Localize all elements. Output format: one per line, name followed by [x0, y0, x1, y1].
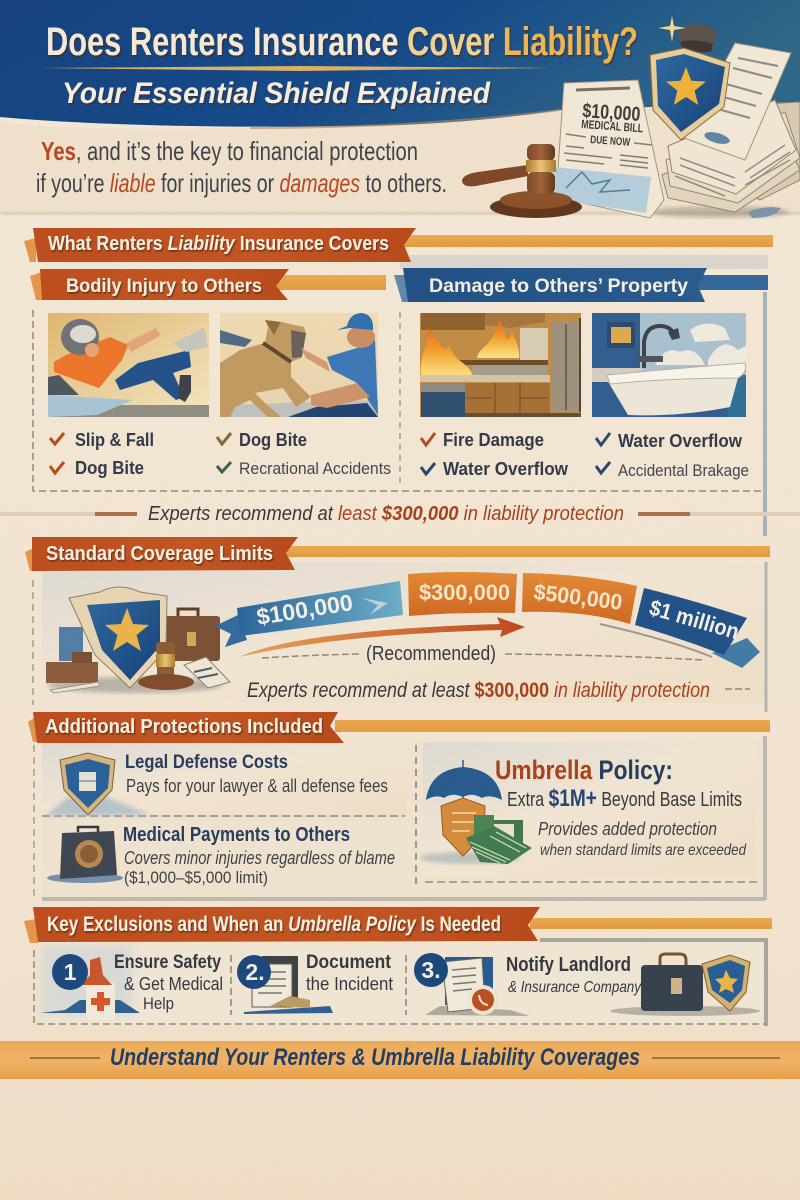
text: medical payments: Medical Payments to Others [123, 824, 350, 846]
list: bodily injury checks: Dog Bite [75, 458, 144, 478]
text: legal defense costs: Pays for your lawyer & all defense fees [126, 776, 388, 796]
icon: shield with star [650, 16, 730, 140]
illustration: medical bill: DUE NOW [590, 134, 631, 149]
icon: legal shield [45, 753, 150, 816]
text: umbrella policy: Umbrella Policy: [495, 755, 673, 785]
illustration: medical bill [554, 80, 664, 218]
text: umbrella policy: Extra $1M+ Beyond Base Limits [507, 785, 742, 812]
intro text: Yes, and it’s the key to financial protection [41, 136, 418, 166]
list: bodily injury checks [50, 430, 391, 478]
intro text: if you’re liable for injuries or damages to others. [36, 168, 447, 198]
sub heading: property damage: Damage to Others’ Property [429, 276, 688, 297]
section 1 header: What Renters Liability Insurance Covers [48, 233, 389, 255]
step 2 [237, 952, 393, 1014]
list: property damage checks: Accidental Brakage [618, 461, 749, 480]
step 3: 3. [421, 957, 441, 983]
list: property damage checks: Water Overflow [618, 431, 743, 451]
list: property damage checks: Fire Damage [443, 430, 544, 450]
footer band: Understand Your Renters & Umbrella Liability Coverages [110, 1044, 640, 1071]
step 1: Help [143, 994, 174, 1013]
section 2 header [25, 537, 770, 571]
step 2: Document [306, 952, 392, 973]
step 3 [414, 953, 642, 1016]
section 1 header [24, 228, 773, 269]
step 1: Ensure Safety [114, 952, 221, 973]
image: slip and fall [48, 313, 209, 417]
sub heading: bodily injury: Bodily Injury to Others [66, 276, 262, 297]
panel: steps background [34, 940, 766, 1026]
panel: what is covered frame [0, 292, 765, 536]
text: legal defense costs: Legal Defense Costs [125, 752, 288, 773]
text: umbrella policy: when standard limits are exceeded [540, 842, 747, 859]
icon: briefcase and shield [610, 954, 760, 1016]
text: medical payments: Covers minor injuries regardless of blame [124, 848, 395, 868]
text: umbrella policy: Provides added protection [538, 819, 717, 839]
section 4 header [24, 907, 772, 943]
section 4 header: Key Exclusions and When an Umbrella Policy Is Needed [47, 913, 501, 936]
illustration: paper pile [650, 43, 800, 218]
ribbon: $500,000: $500,000 [532, 579, 624, 615]
sub heading: property damage [394, 268, 768, 302]
image: water overflow tub [592, 313, 746, 417]
ribbon: $100,000: $100,000 [255, 589, 355, 630]
intro text [36, 136, 447, 198]
ribbon: $1 million: $1 million [647, 595, 742, 644]
label: recommended [262, 643, 705, 665]
list: bodily injury checks: Dog Bite [239, 430, 307, 450]
subtitle: Your Essential Shield Explained [62, 77, 491, 110]
step 2: the Incident [306, 974, 393, 994]
ribbon: $300,000 [408, 572, 517, 616]
list: bodily injury checks: Recrational Accidents [239, 459, 391, 478]
text: medical payments [123, 824, 395, 887]
text: umbrella policy [495, 755, 747, 859]
illustration: shield, briefcase and gavel [46, 587, 230, 693]
sub heading: bodily injury [30, 269, 386, 300]
illustration: medical bill: MEDICAL BILL [581, 117, 644, 135]
list: property damage checks: Water Overflow [443, 459, 569, 479]
image: fire damage [420, 313, 581, 417]
panel: additional protections background [34, 736, 765, 900]
step 2: 2. [245, 959, 265, 985]
step 1: 1 [64, 959, 77, 985]
ribbon: $1 million [635, 588, 760, 668]
illustration: medical bill: $10,000 [582, 100, 641, 126]
icon: umbrella with shield and money [420, 760, 532, 864]
section 3 header: Additional Protections Included [45, 716, 323, 738]
header banner [0, 0, 800, 215]
callout: coverage recommendation: Experts recommend at least $300,000 in liability protection [247, 679, 710, 702]
icon: gavel [462, 144, 582, 218]
step 1: & Get Medical [124, 974, 223, 994]
arrow: coverage progression [239, 617, 712, 657]
footer band [0, 1041, 800, 1079]
step 3: Notify Landlord [506, 954, 631, 976]
step 1 [40, 952, 223, 1020]
list: property damage checks [421, 430, 749, 480]
title: Does Renters Insurance Cover Liability? [46, 20, 638, 64]
text: legal defense costs [125, 752, 388, 796]
list: bodily injury checks: Slip & Fall [75, 430, 154, 450]
ribbon: $300,000: $300,000 [419, 580, 510, 605]
callout: expert recommendation: Experts recommend at least $300,000 in liability protection [148, 503, 624, 525]
ribbon: $500,000 [522, 573, 637, 624]
step 3: & Insurance Company [508, 979, 642, 996]
icon: medical bag [47, 827, 123, 883]
text: medical payments: ($1,000–$5,000 limit) [124, 868, 268, 887]
image: dog bite [220, 313, 378, 417]
title rule [40, 66, 552, 71]
label: recommended: (Recommended) [366, 643, 496, 665]
panel: coverage limits background [33, 562, 766, 712]
ribbon: $100,000 [215, 581, 403, 647]
section 3 header [28, 712, 770, 743]
section 2 header: Standard Coverage Limits [46, 543, 273, 565]
